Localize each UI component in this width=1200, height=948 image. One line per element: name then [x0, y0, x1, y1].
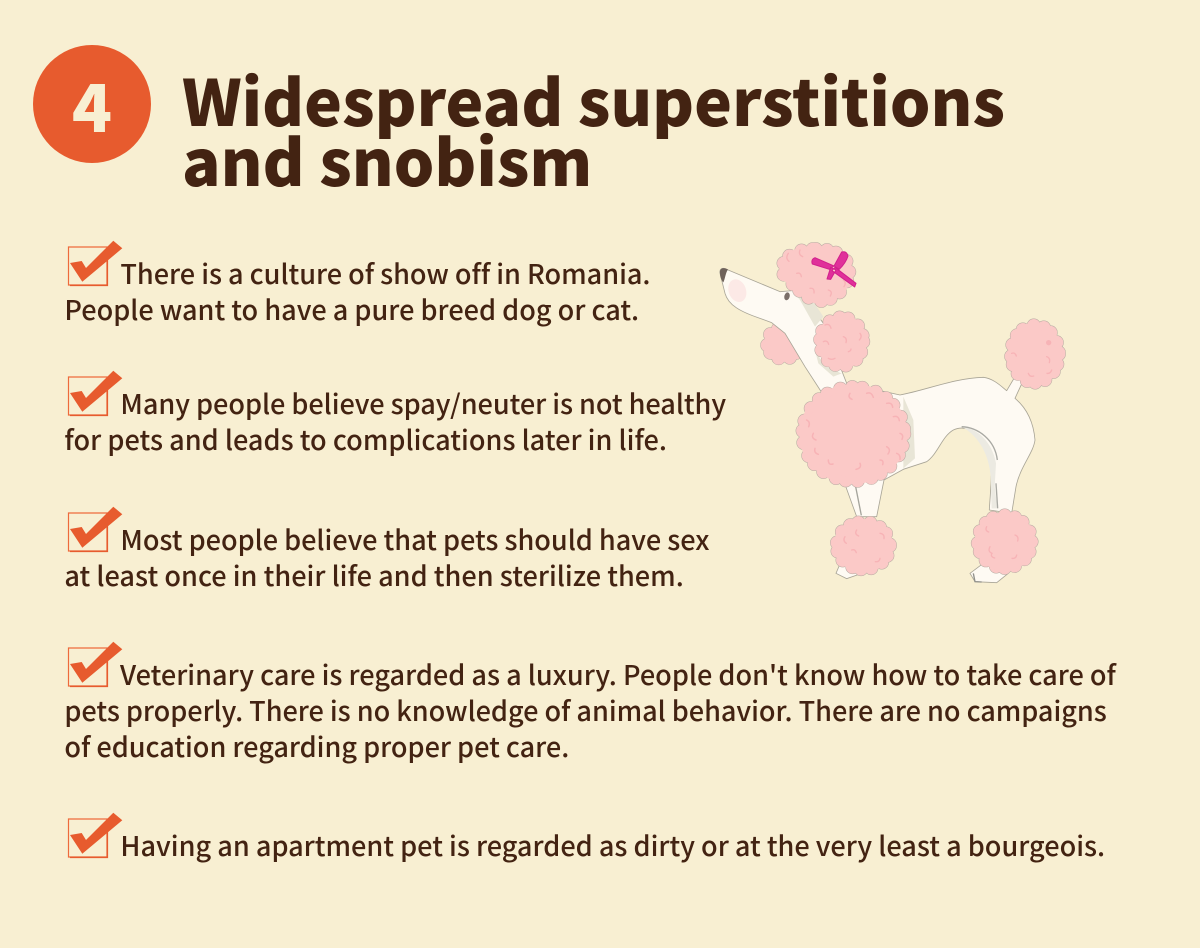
icon: checkbox 3 — [68, 506, 122, 552]
pom: head — [783, 249, 849, 301]
list item 2 — [64, 383, 726, 458]
poodle body — [720, 268, 1035, 517]
pom: neck — [820, 318, 863, 366]
icon: checkbox 2 — [68, 370, 122, 416]
pom: chest — [803, 387, 904, 481]
pom: tail — [1011, 326, 1059, 382]
list item 4: of education regarding proper pet care. — [64, 726, 569, 765]
list item 3 — [64, 519, 709, 594]
list item 4 — [64, 654, 1117, 765]
list item 4: Veterinary care is regarded as a luxury. People don't know how to take care of — [120, 654, 1116, 693]
list item 2: for pets and leads to complications later in life. — [64, 419, 667, 458]
fur shadows — [787, 283, 823, 327]
pom: rear foot — [978, 516, 1031, 568]
icon: checkbox 1 — [68, 240, 122, 286]
eye — [783, 292, 791, 301]
list item 3: Most people believe that pets should have sex — [120, 519, 709, 558]
illustration: pink poodle — [720, 242, 1066, 584]
pom: front foot — [837, 522, 890, 569]
pink bow — [812, 252, 856, 287]
title — [182, 53, 1005, 205]
icon: checkbox 5 — [68, 812, 122, 858]
list item 1: There is a culture of show off in Romania. — [120, 253, 650, 292]
icon: checkbox 4 — [68, 642, 122, 688]
feet — [836, 560, 867, 579]
number badge: 4 — [72, 56, 112, 152]
list item 2: Many people believe spay/neuter is not healthy — [120, 383, 726, 422]
nose and cheek — [720, 268, 728, 282]
list item 5: Having an apartment pet is regarded as dirty or at the very least a bourgeois. — [120, 825, 1105, 864]
list item 3: at least once in their life and then sterilize them. — [64, 555, 684, 594]
list item 4: pets properly. There is no knowledge of animal behavior. There are no campaigns — [64, 690, 1107, 729]
list item 1 — [64, 253, 650, 328]
number badge — [33, 45, 151, 163]
title: and snobism — [182, 113, 592, 205]
ear puff behind neck — [767, 328, 799, 359]
list item 1: People want to have a pure breed dog or cat. — [64, 289, 639, 328]
title: Widespread superstitions — [182, 53, 1005, 145]
